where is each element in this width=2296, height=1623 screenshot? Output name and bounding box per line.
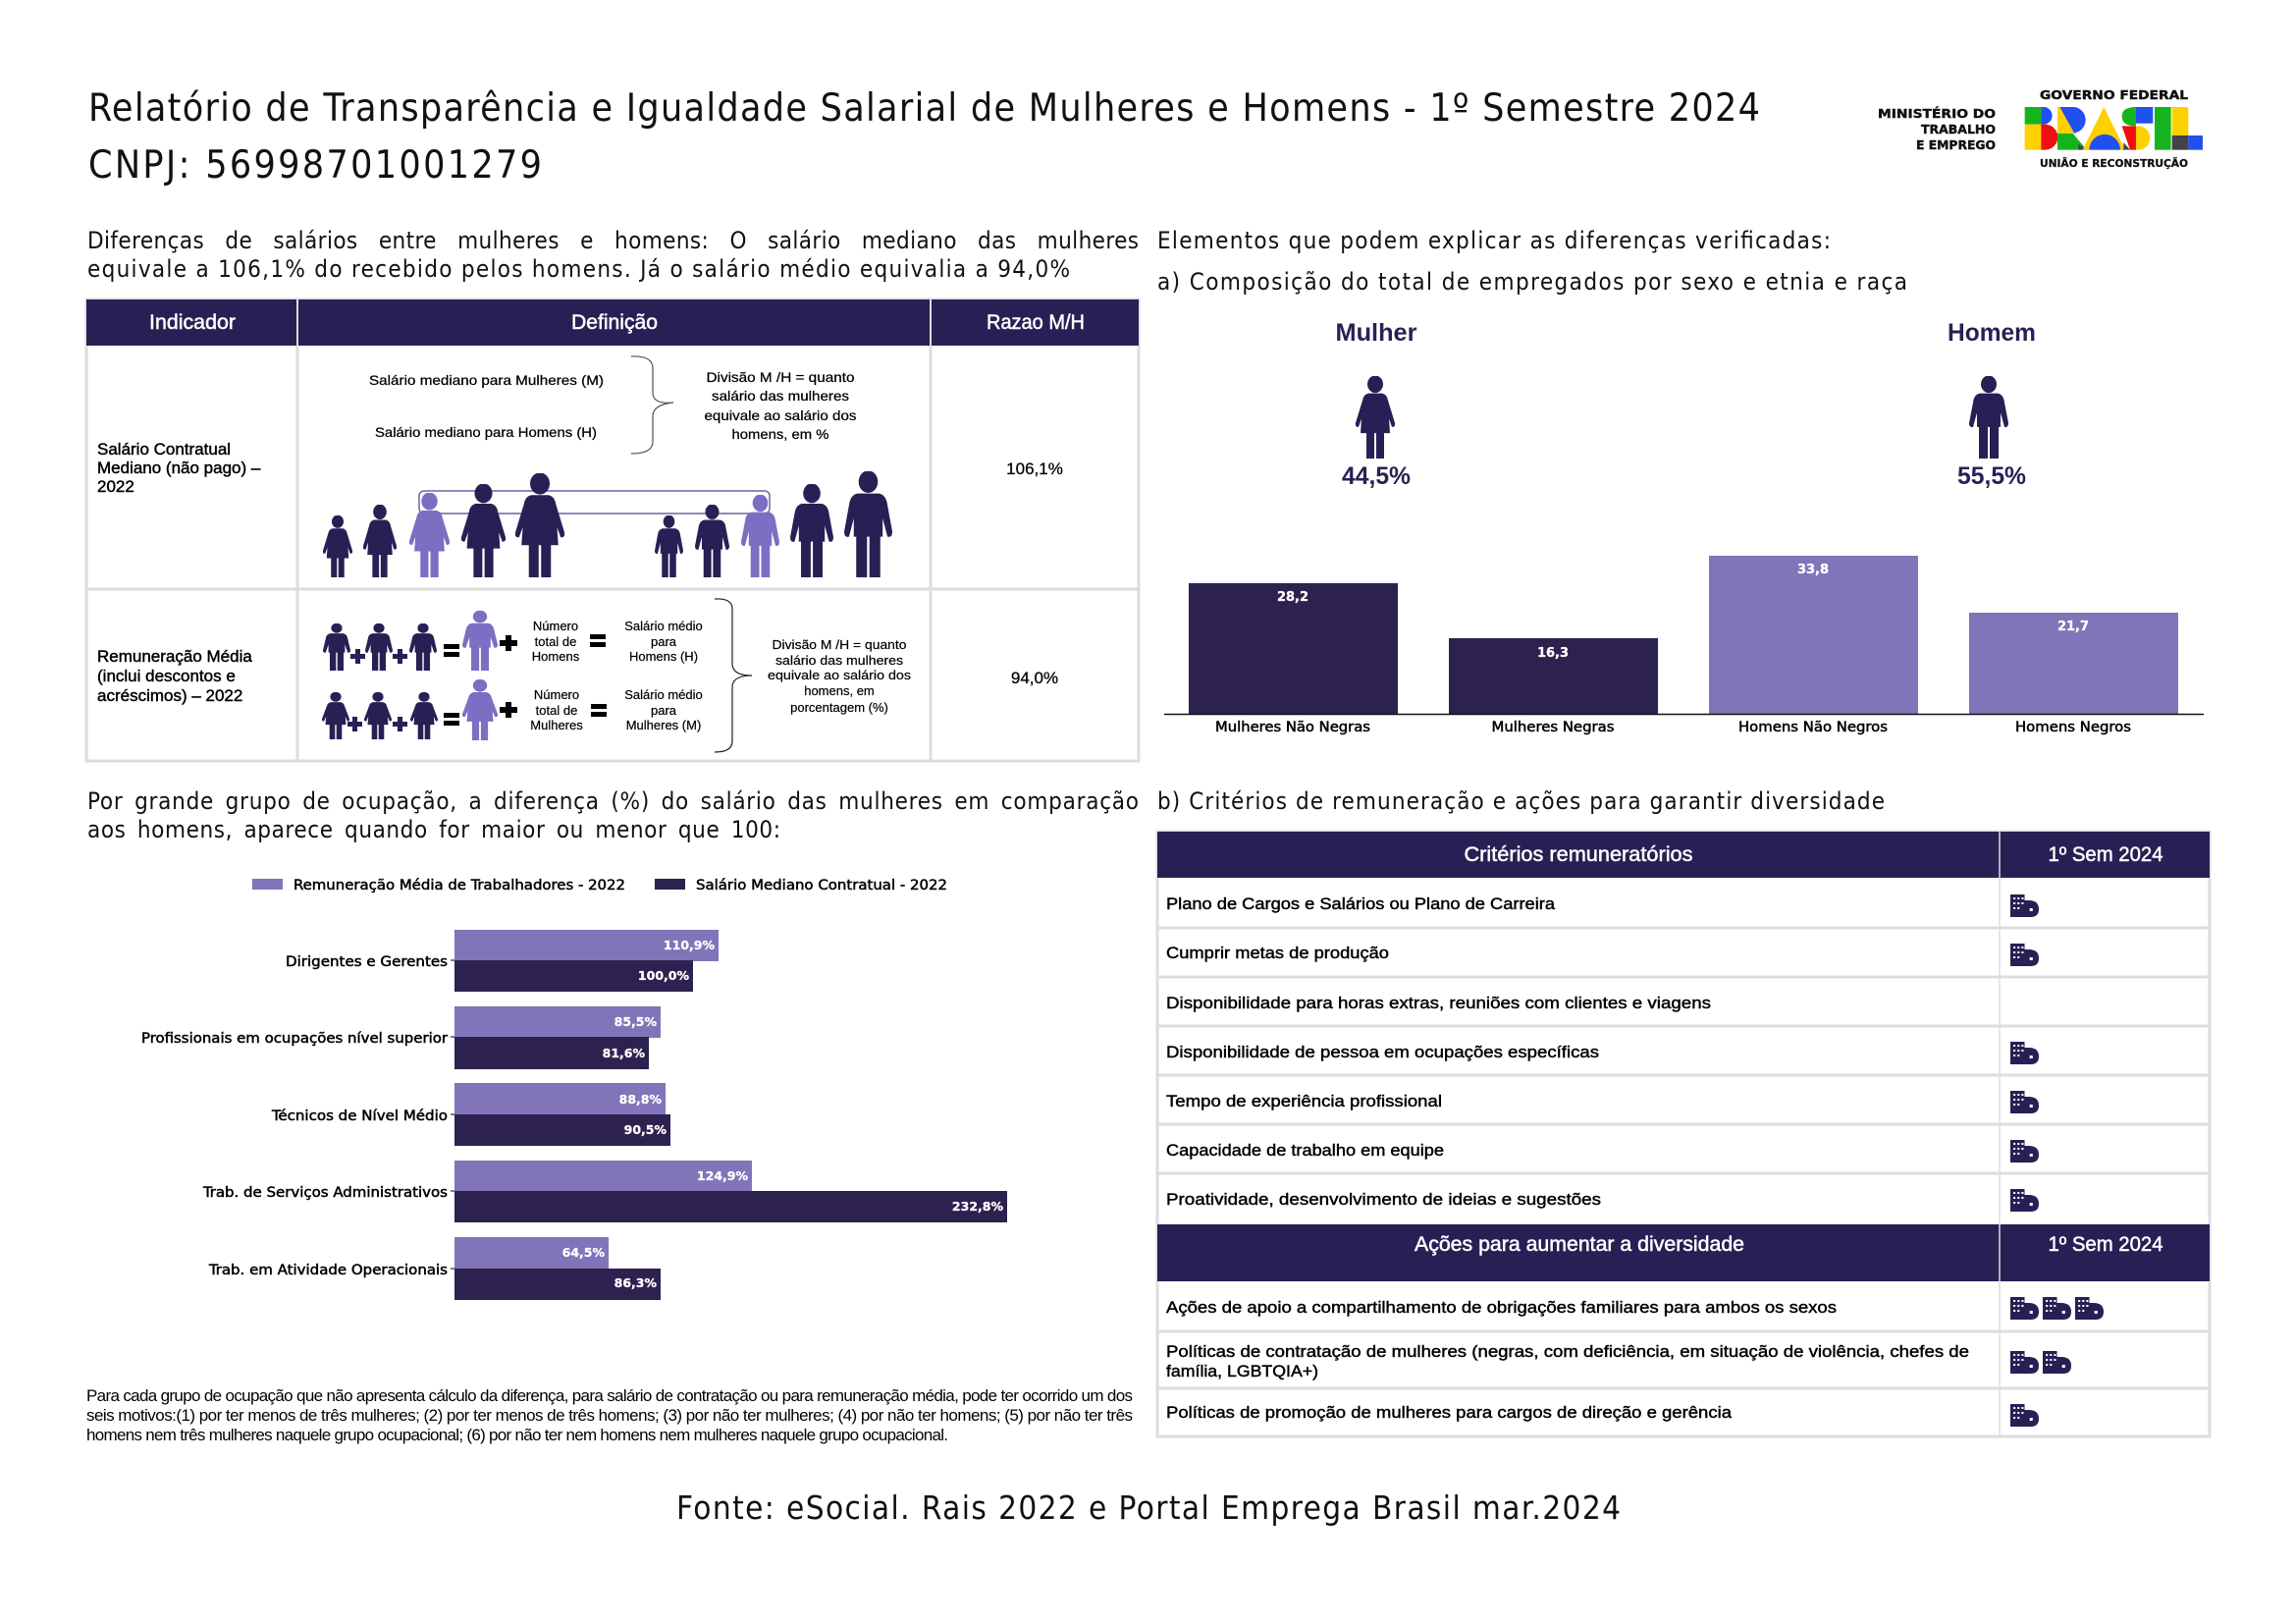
legend: Salário Mediano Contratual - 2022 xyxy=(696,878,947,893)
median formula text: Salário mediano para Mulheres (M) xyxy=(369,372,604,388)
text: por grande grupo: Por grande grupo de ocupação, a diferença (%) do salário das mulheres em comparação xyxy=(87,787,1139,815)
average formula text: Homens xyxy=(532,649,580,664)
header: critérios: Critérios remuneratórios xyxy=(1465,843,1692,866)
footnote xyxy=(86,1386,1133,1444)
average formula text: total de xyxy=(535,634,576,649)
table header xyxy=(86,299,1139,346)
text: diferenças de salários xyxy=(87,227,1139,283)
column chart: Mulheres Não Negras xyxy=(1215,720,1370,735)
stat: mulher: 44,5% xyxy=(1342,462,1411,490)
table header: Definição xyxy=(571,311,658,334)
rows: critérios: Capacidade de trabalho em equipe xyxy=(1166,1141,1444,1160)
group: profissionais: Profissionais em ocupações nível superior xyxy=(141,1031,449,1047)
average formula text: Homens (H) xyxy=(629,649,698,664)
row label: remuneração média xyxy=(97,647,252,705)
icons: ações xyxy=(2010,1297,2104,1427)
footnote: homens nem três mulheres naquele grupo ocupacional; (6) por não ter nem homens nem mulheres naquele grupo ocupacional. xyxy=(86,1426,948,1444)
rows: critérios: Disponibilidade para horas extras, reuniões com clientes e viagens xyxy=(1166,994,1711,1012)
table: indicadores xyxy=(86,299,1139,761)
header: ações: 1º Sem 2024 xyxy=(2048,1233,2163,1256)
average formula text: para xyxy=(651,703,677,718)
row label: salário mediano: Salário Contratual xyxy=(97,440,231,459)
heading: critérios: b) Critérios de remuneração e ações para garantir diversidade xyxy=(1157,787,1885,815)
column chart: 28,2 xyxy=(1277,590,1308,605)
average formula text: equivale ao salário dos xyxy=(768,668,912,682)
rows: ações xyxy=(1166,1298,1969,1422)
median formula text: equivale ao salário dos xyxy=(705,407,856,423)
rows: ações: Ações de apoio a compartilhamento de obrigações familiares para ambos os sexos xyxy=(1166,1298,1837,1317)
value: 106,1%: 106,1% xyxy=(1006,460,1063,478)
text: por grande grupo: aos homens, aparece quando for maior ou menor que 100: xyxy=(87,816,780,843)
average formula text: Salário médio xyxy=(624,687,703,702)
column chart: 21,7 xyxy=(2057,620,2089,634)
text: diferenças de salários: equivale a 106,1% do recebido pelos homens. Já o salário médio equivalia a 94,0% xyxy=(87,255,1070,283)
row label: salário mediano xyxy=(97,440,261,496)
logo: ministério and governo federal: GOVERNO FEDERAL xyxy=(2040,88,2188,102)
icons: critérios xyxy=(2010,894,2039,1212)
column chart: 16,3 xyxy=(1537,646,1569,661)
table header: Razao M/H xyxy=(987,311,1085,334)
title: Relatório de Transparência e Igualdade Salarial de Mulheres e Homens - 1º Semestre 2024 xyxy=(88,86,1760,131)
logo: ministério and governo federal xyxy=(1878,88,2203,170)
title: CNPJ: 56998701001279 xyxy=(88,143,542,188)
average formula text xyxy=(530,599,912,752)
row label: remuneração média: acréscimos) – 2022 xyxy=(97,686,242,705)
column chart: Homens Negros xyxy=(2015,720,2131,735)
average formula text: para xyxy=(651,634,677,649)
group: profissionais: 85,5% xyxy=(614,1014,657,1029)
stat: homem xyxy=(1948,319,2036,490)
row label: salário mediano: 2022 xyxy=(97,477,134,496)
logo: ministério and governo federal: TRABALHO xyxy=(1921,123,1996,136)
column chart: 33,8 xyxy=(1797,563,1829,577)
group: administrativos: Trab. de Serviços Administrativos xyxy=(202,1185,448,1201)
logo: ministério and governo federal: E EMPREGO xyxy=(1916,138,1996,152)
header: ações: Ações para aumentar a diversidade xyxy=(1415,1233,1744,1256)
average formula text: homens, em xyxy=(804,683,875,698)
rows: critérios: Tempo de experiência profissional xyxy=(1166,1092,1442,1110)
header: critérios: 1º Sem 2024 xyxy=(2048,843,2163,866)
group: administrativos xyxy=(202,1161,1007,1222)
rows: critérios: Plano de Cargos e Salários ou Plano de Carreira xyxy=(1166,894,1556,913)
group: operacionais: 86,3% xyxy=(614,1275,657,1290)
stat: homem: 55,5% xyxy=(1957,462,2026,490)
group: profissionais xyxy=(141,1006,661,1069)
median formula text: homens, em % xyxy=(732,426,828,442)
table header: Indicador xyxy=(149,311,236,334)
average formula text: Salário médio xyxy=(624,619,703,633)
group: operacionais: 64,5% xyxy=(562,1245,605,1260)
value: 94,0%: 94,0% xyxy=(1011,669,1058,687)
title xyxy=(88,86,1760,188)
text: por grande grupo xyxy=(87,787,1139,843)
column chart: Mulheres Negras xyxy=(1492,720,1614,735)
average formula text: Divisão M /H = quanto xyxy=(772,637,907,652)
median formula text: salário das mulheres xyxy=(712,388,849,404)
logo: ministério and governo federal: UNIÃO E RECONSTRUÇÃO xyxy=(2040,157,2188,170)
heading: elementos: Elementos que podem explicar as diferenças verificadas: xyxy=(1157,227,1831,254)
stat: homem: Homem xyxy=(1948,319,2036,347)
median formula text: Divisão M /H = quanto xyxy=(707,369,855,385)
group: técnicos: 88,8% xyxy=(619,1092,662,1107)
group: técnicos: 90,5% xyxy=(624,1122,667,1137)
group: dirigentes: 110,9% xyxy=(664,938,715,952)
group: profissionais: 81,6% xyxy=(603,1046,645,1060)
average formula text: total de xyxy=(536,703,577,718)
average formula text: Número xyxy=(533,619,578,633)
group: operacionais xyxy=(208,1237,661,1300)
rows: ações: Políticas de contratação de mulheres (negras, com deficiência, em situação de violência, chefes de xyxy=(1166,1342,1969,1361)
text: diferenças de salários: Diferenças de salários entre mulheres e homens: O salário mediano das mulheres xyxy=(87,227,1139,254)
average figures xyxy=(322,611,607,740)
average formula text: salário das mulheres xyxy=(775,653,904,668)
stat: mulher: Mulher xyxy=(1335,319,1417,347)
header: critérios xyxy=(1157,832,2210,878)
average formula text: Número xyxy=(534,687,579,702)
footnote: Para cada grupo de ocupação que não apresenta cálculo da diferença, para salário de contratação ou para remuneração média, pode ter ocorrido um dos xyxy=(86,1386,1133,1405)
source: Fonte: eSocial. Rais 2022 e Portal Emprega Brasil mar.2024 xyxy=(676,1488,1621,1527)
column chart xyxy=(1164,556,2204,735)
group: técnicos: Técnicos de Nível Médio xyxy=(271,1109,448,1124)
heading: elementos: a) Composição do total de empregados por sexo e etnia e raça xyxy=(1157,268,1907,296)
rows: critérios: Proatividade, desenvolvimento de ideias e sugestões xyxy=(1166,1190,1601,1209)
logo: ministério and governo federal: MINISTÉRIO DO xyxy=(1878,106,1996,121)
average formula text: porcentagem (%) xyxy=(790,700,888,715)
horizontal bar chart xyxy=(141,930,1007,1300)
group: administrativos: 232,8% xyxy=(952,1199,1003,1214)
legend xyxy=(252,878,947,893)
row label: salário mediano: Mediano (não pago) – xyxy=(97,459,261,477)
average formula text: Mulheres (M) xyxy=(626,718,701,732)
stat: mulher xyxy=(1335,319,1417,490)
heading: elementos xyxy=(1157,227,1907,296)
rows: critérios xyxy=(1166,894,1711,1209)
footnote: seis motivos:(1) por ter menos de três mulheres; (2) por ter menos de três homens; (3) por não ter mulheres; (4) por não ter homens; (5) por não ter três xyxy=(86,1406,1133,1425)
header: ações xyxy=(1157,1224,2210,1281)
group: dirigentes xyxy=(286,930,719,992)
median formula text: Salário mediano para Homens (H) xyxy=(375,424,597,440)
row label: remuneração média: Remuneração Média xyxy=(97,647,252,666)
group: dirigentes: Dirigentes e Gerentes xyxy=(286,954,448,970)
median formula text xyxy=(369,356,856,454)
group: administrativos: 124,9% xyxy=(697,1168,748,1183)
rows: critérios: Disponibilidade de pessoa em ocupações específicas xyxy=(1166,1043,1599,1061)
average formula text: Mulheres xyxy=(530,718,583,732)
row label: remuneração média: (inclui descontos e xyxy=(97,667,236,685)
legend: Remuneração Média de Trabalhadores - 2022 xyxy=(294,878,625,893)
table: critérios e ações xyxy=(1157,832,2210,1436)
rows: ações: família, LGBTQIA+) xyxy=(1166,1362,1318,1380)
rows: critérios: Cumprir metas de produção xyxy=(1166,944,1389,962)
rows: ações: Políticas de promoção de mulheres para cargos de direção e gerência xyxy=(1166,1403,1733,1422)
group: técnicos xyxy=(271,1083,670,1146)
column chart: Homens Não Negros xyxy=(1738,720,1888,735)
group: dirigentes: 100,0% xyxy=(638,968,689,983)
group: operacionais: Trab. em Atividade Operacionais xyxy=(208,1263,448,1278)
median figures xyxy=(323,470,892,577)
